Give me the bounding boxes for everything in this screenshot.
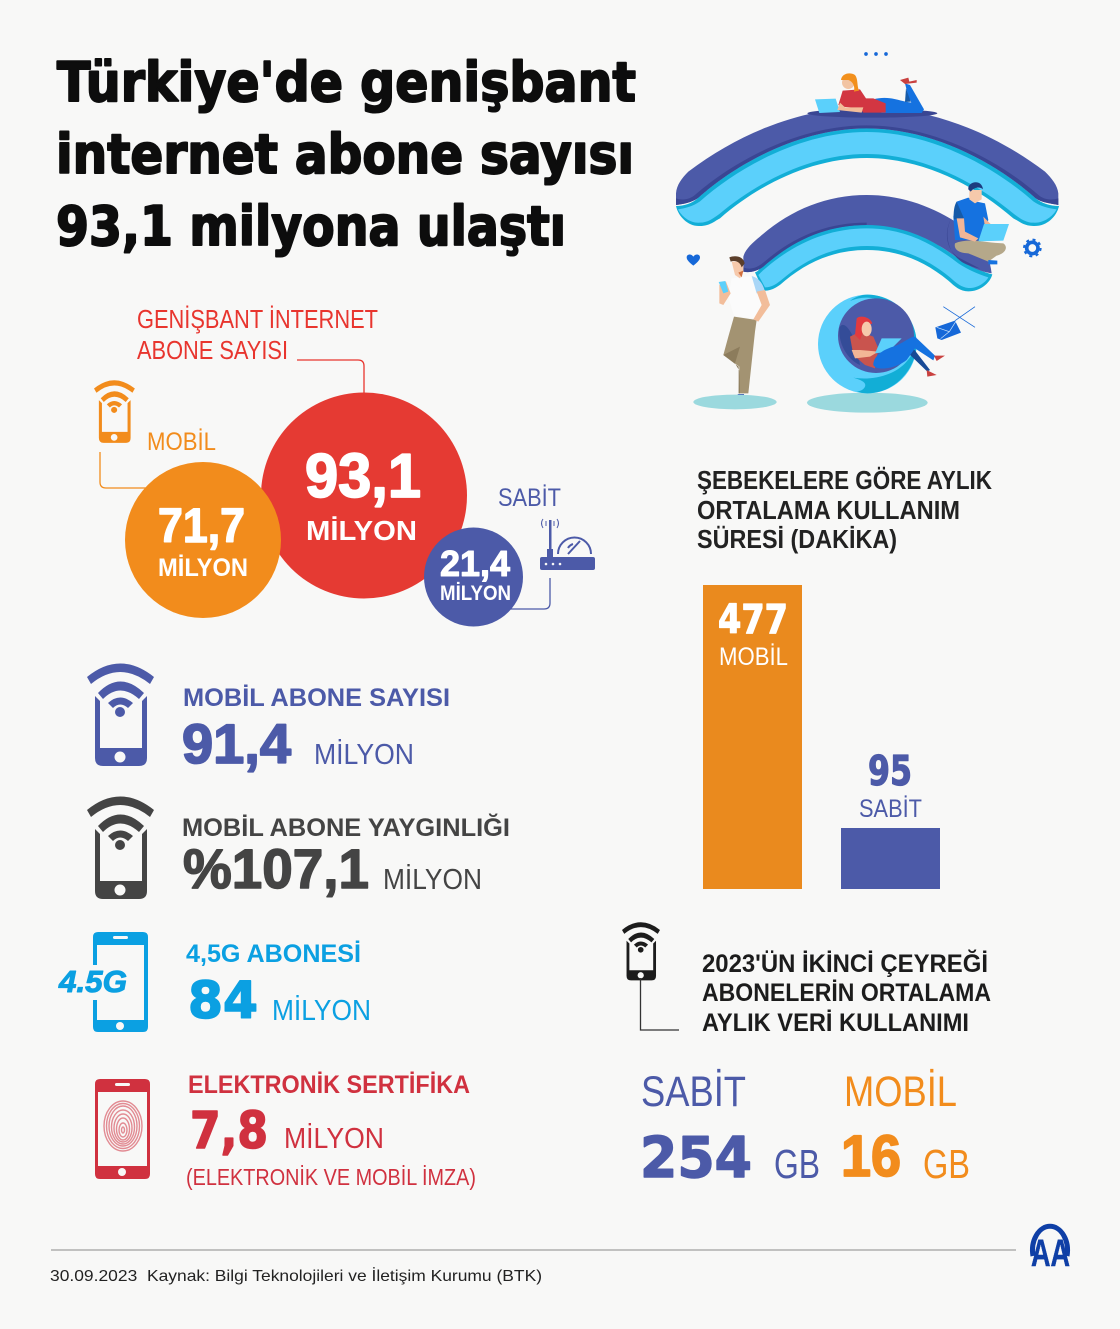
stat: mobile penetration: MİLYON xyxy=(383,863,482,896)
panel: monthly usage bar chart xyxy=(697,465,992,889)
data use heading: AYLIK VERİ KULLANIMI xyxy=(702,1009,969,1037)
panel: subscriber bubbles xyxy=(94,304,595,626)
bar: mobile: 477 xyxy=(718,597,788,643)
icon: 4.5G phone: 4.5G xyxy=(58,964,127,999)
dots xyxy=(864,52,888,56)
value: fixed xyxy=(640,1068,820,1191)
icon: fingerprint phone xyxy=(95,1079,150,1179)
bar: mobile: MOBİL xyxy=(719,642,788,671)
icon: grey phone wifi xyxy=(87,796,154,899)
bubble: total: 93,1 xyxy=(305,442,421,511)
man sitting on middle arc with laptop xyxy=(953,182,1009,264)
standing man with phone xyxy=(719,256,770,399)
icon: orange mobile phone xyxy=(94,380,135,443)
icon: black phone wifi xyxy=(622,922,660,980)
illustration: wifi symbol with people xyxy=(676,52,1059,413)
bar: mobile xyxy=(703,585,802,889)
stat: mobile penetration: MOBİL ABONE YAYGINLIĞI xyxy=(182,813,510,842)
bubble: total: MİLYON xyxy=(306,515,417,546)
connector: total xyxy=(297,360,364,394)
shadows under figures xyxy=(693,393,928,413)
bar: fixed: 95 xyxy=(868,747,912,795)
stat: electronic certificate: ELEKTRONİK SERTİFİKA xyxy=(188,1071,470,1099)
icon: gear xyxy=(1024,240,1041,256)
chart heading: SÜRESİ (DAKİKA) xyxy=(697,524,897,554)
label: mobile: MOBİL xyxy=(147,427,216,456)
panel: average monthly data use xyxy=(622,922,991,1191)
value: mobile: GB xyxy=(923,1141,970,1187)
stat: mobile penetration xyxy=(87,796,510,900)
heading: broadband subscribers: ABONE SAYISI xyxy=(137,335,288,365)
bubble: mobile: MİLYON xyxy=(158,554,248,582)
icon: flying envelope xyxy=(935,307,975,340)
stat: 4.5G subscribers xyxy=(58,932,371,1032)
stat: 4.5G subscribers: 84 xyxy=(188,972,258,1031)
icon: heart xyxy=(687,254,700,266)
bar: fixed: SABİT xyxy=(859,794,922,823)
egg chair with woman xyxy=(818,295,945,393)
top arc xyxy=(676,107,1059,226)
bubble: fixed xyxy=(424,528,523,626)
value: mobile: 16 xyxy=(841,1124,901,1189)
title: 93,1 milyona ulaştı xyxy=(56,195,566,258)
value: mobile: MOBİL xyxy=(844,1068,957,1116)
bubble: fixed: 21,4 xyxy=(440,543,510,584)
value: fixed: 254 xyxy=(640,1126,752,1191)
title: Türkiye'de genişbant xyxy=(57,51,636,114)
connector: mobile xyxy=(100,452,150,488)
stat: electronic certificate: (ELEKTRONİK VE MOBİL İMZA) xyxy=(186,1164,476,1190)
heading: broadband subscribers xyxy=(137,304,378,365)
stat: mobile penetration: %107,1 xyxy=(183,837,369,900)
data use heading: ABONELERİN ORTALAMA xyxy=(702,979,991,1007)
bubble: total xyxy=(261,392,467,598)
value: fixed: GB xyxy=(774,1141,820,1187)
icon: 4.5G phone xyxy=(58,932,148,1032)
footer: 30.09.2023 Kaynak: Bilgi Teknolojileri ve İletişim Kurumu (BTK) xyxy=(50,1266,542,1285)
stat: electronic certificate xyxy=(95,1071,476,1190)
icon: blue phone wifi xyxy=(87,664,154,766)
connector xyxy=(640,978,679,1030)
value: fixed: SABİT xyxy=(641,1068,746,1116)
stat: 4.5G subscribers: MİLYON xyxy=(272,994,371,1027)
data use heading: 2023'ÜN İKİNCİ ÇEYREĞİ xyxy=(702,949,988,978)
bubble: mobile: 71,7 xyxy=(158,500,245,553)
stat: mobile subscribers: MOBİL ABONE SAYISI xyxy=(183,684,450,712)
chart heading xyxy=(697,465,992,554)
chart heading: ŞEBEKELERE GÖRE AYLIK xyxy=(697,465,992,495)
heading: broadband subscribers: GENİŞBANT İNTERNET xyxy=(137,304,378,334)
stat: mobile subscribers: 91,4 xyxy=(182,712,291,775)
middle arc xyxy=(743,195,992,291)
data use heading xyxy=(702,949,991,1037)
chart heading: ORTALAMA KULLANIM xyxy=(697,495,960,525)
stat: mobile subscribers: MİLYON xyxy=(314,738,414,771)
bar: fixed xyxy=(841,747,940,889)
value: mobile xyxy=(841,1068,970,1189)
stat: electronic certificate: 7,8 xyxy=(190,1102,268,1161)
logo: AA: AA xyxy=(1031,1233,1070,1275)
label: fixed: SABİT xyxy=(498,483,561,512)
connector: fixed xyxy=(510,578,550,609)
stat: electronic certificate: MİLYON xyxy=(284,1122,384,1155)
title xyxy=(56,51,636,258)
bubble: fixed: MİLYON xyxy=(440,582,511,605)
bubble: mobile xyxy=(125,462,281,618)
icon: router xyxy=(540,519,595,570)
stat: mobile subscribers xyxy=(87,664,450,775)
person lying on top arc with laptop xyxy=(807,73,937,118)
title: internet abone sayısı xyxy=(56,123,634,186)
stat: 4.5G subscribers: 4,5G ABONESİ xyxy=(186,940,361,968)
logo: AA xyxy=(1031,1226,1070,1275)
